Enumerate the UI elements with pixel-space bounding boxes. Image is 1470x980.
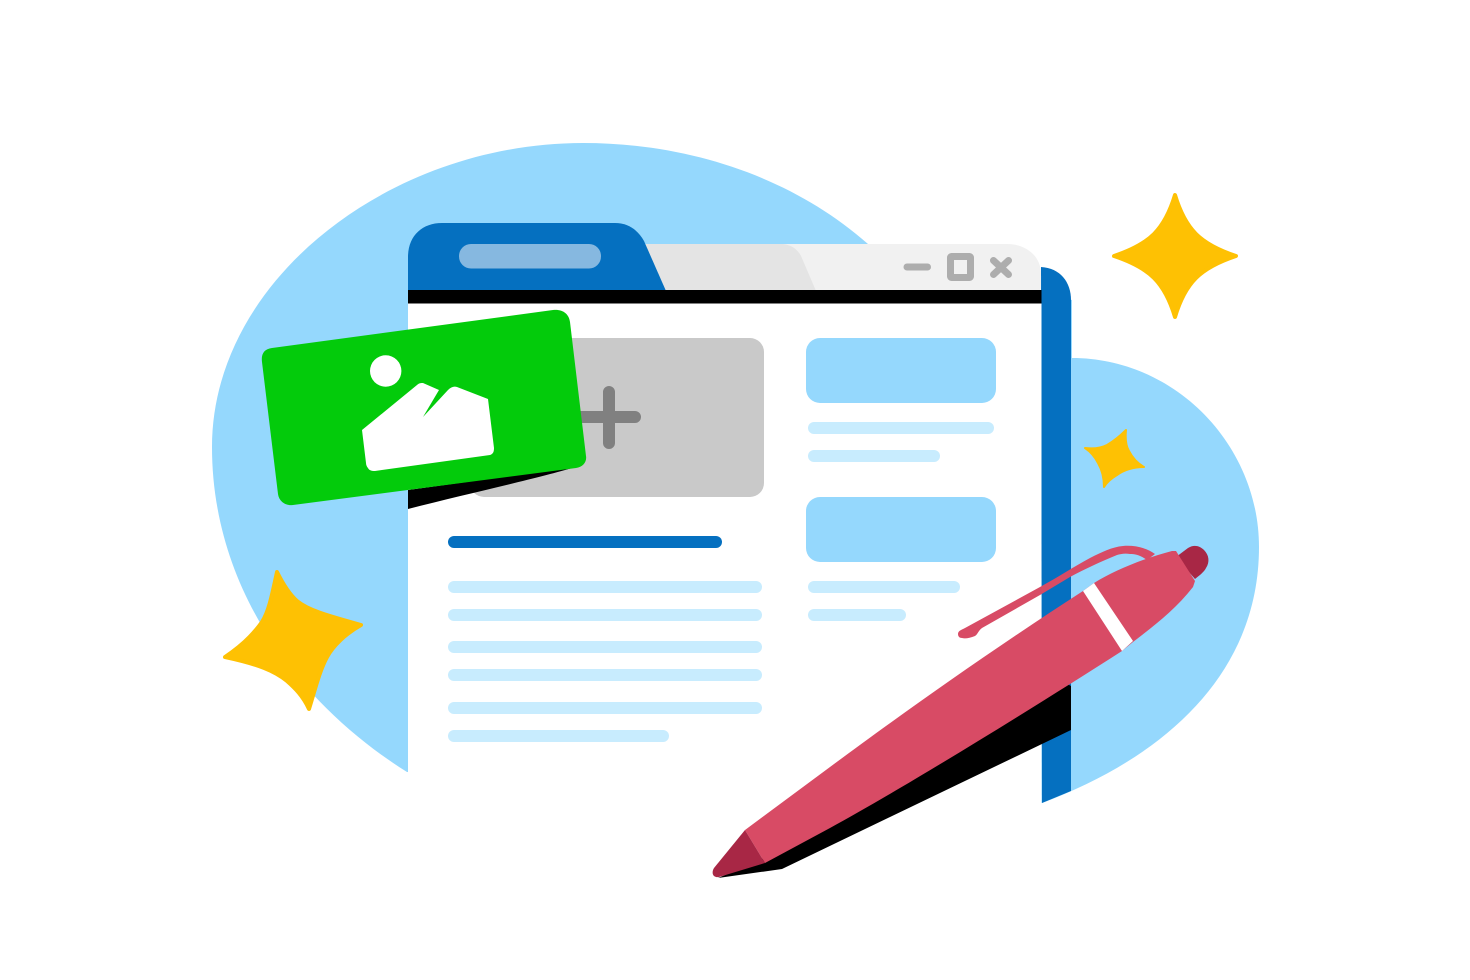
background blob	[212, 143, 1259, 803]
pen body	[745, 551, 1195, 863]
browser window page	[408, 290, 1042, 910]
black divider	[408, 290, 1042, 304]
sparkle: small	[1085, 430, 1144, 487]
pen band	[1083, 583, 1133, 651]
image placeholder with plus	[470, 338, 764, 497]
sparkle: top right	[1114, 195, 1236, 317]
pen	[713, 546, 1208, 877]
green image card	[262, 310, 586, 509]
sparkle: bottom left	[225, 572, 361, 709]
pen button	[1176, 546, 1208, 579]
pen clip	[958, 546, 1155, 638]
active tab	[408, 223, 666, 291]
pen tip	[713, 830, 765, 877]
browser tab bar	[408, 223, 1042, 304]
icon: picture	[362, 355, 494, 471]
tab title pill	[459, 244, 601, 268]
window controls	[904, 256, 1008, 278]
pen shadow	[718, 680, 1071, 878]
article text lines	[448, 536, 762, 742]
sidebar cards	[806, 338, 996, 621]
blue back panel	[1041, 267, 1071, 803]
